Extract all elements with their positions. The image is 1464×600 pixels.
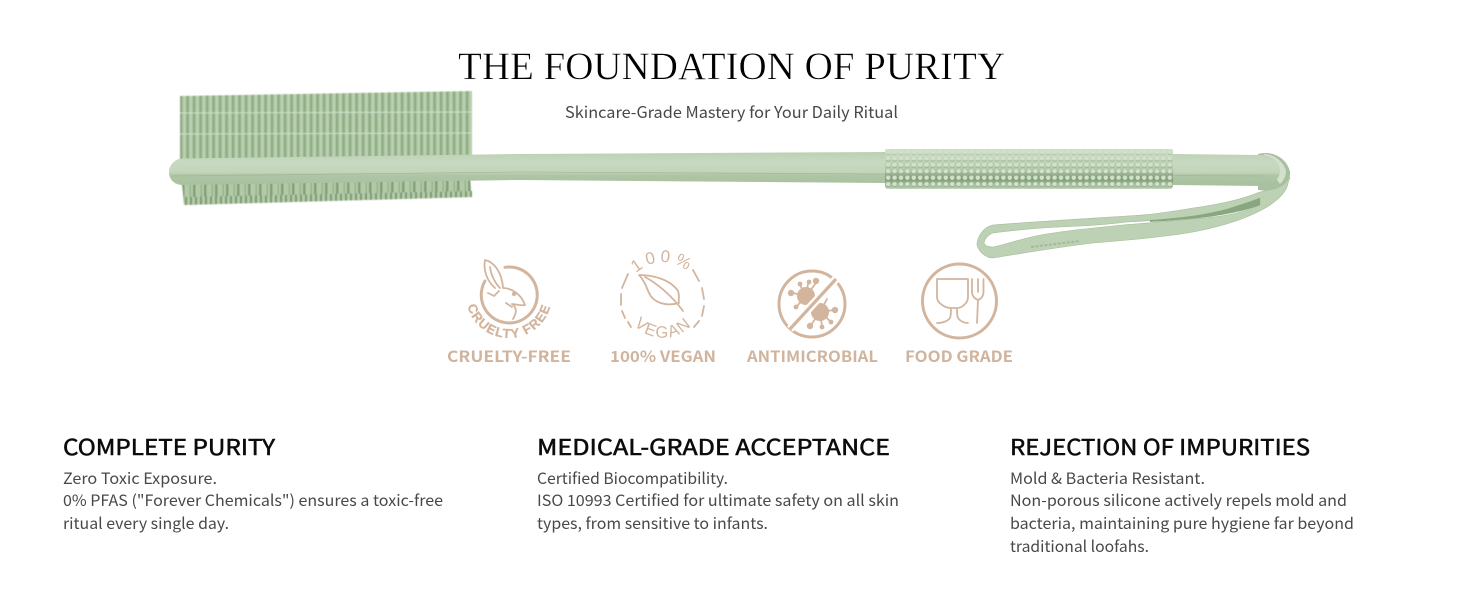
heading: REJECTION OF IMPURITIES <box>1010 430 1310 462</box>
heading: COMPLETE PURITY <box>63 430 275 462</box>
heading: MEDICAL-GRADE ACCEPTANCE <box>537 430 890 462</box>
badge text: CRUELTY FREE <box>468 304 550 338</box>
badge: food grade <box>905 264 1013 367</box>
icon: leaf <box>620 250 705 338</box>
body text: ISO 10993 Certified for ultimate safety on all skin <box>537 489 899 511</box>
icon: leaf: 100% <box>632 250 690 272</box>
textured grip <box>885 149 1173 189</box>
subtitle: Skincare-Grade Mastery for Your Daily Ritual <box>565 99 898 123</box>
badge: antimicrobial <box>746 271 878 367</box>
icon: crossed-out microbe <box>779 271 845 337</box>
body text: ritual every single day. <box>63 512 229 534</box>
body text: traditional loofahs. <box>1010 535 1149 557</box>
body text: Non-porous silicone actively repels mold and <box>1010 489 1347 511</box>
body text: bacteria, maintaining pure hygiene far beyond <box>1010 512 1354 534</box>
title: THE FOUNDATION OF PURITY <box>458 45 1005 88</box>
strap inner shadow <box>1150 198 1260 222</box>
column: medical-grade acceptance <box>537 430 899 534</box>
label: FOOD GRADE <box>905 345 1013 367</box>
body text: types, from sensitive to infants. <box>537 512 768 534</box>
strap logo imprint <box>1031 241 1080 247</box>
strap loop <box>977 177 1290 258</box>
lower bristles <box>182 178 472 205</box>
body text: Zero Toxic Exposure. <box>63 467 217 489</box>
product: silicone back brush <box>169 91 1290 258</box>
handle end cap <box>1258 153 1290 191</box>
label: 100% VEGAN <box>610 345 716 367</box>
badge: cruelty-free <box>447 259 571 367</box>
body text <box>63 467 443 534</box>
body text: Certified Biocompatibility. <box>537 467 728 489</box>
label: ANTIMICROBIAL <box>746 345 878 367</box>
column: complete purity <box>63 430 443 534</box>
handle <box>169 152 1280 186</box>
body text <box>1010 467 1354 557</box>
badge: 100% vegan <box>610 250 716 367</box>
icon: glass and fork <box>922 264 996 338</box>
upper bristles <box>180 91 472 162</box>
body text <box>537 467 899 534</box>
label: CRUELTY-FREE <box>447 345 571 367</box>
icon: leaf: VEGAN <box>637 316 690 338</box>
body text: 0% PFAS ("Forever Chemicals") ensures a toxic-free <box>63 489 443 511</box>
column: rejection of impurities <box>1010 430 1354 557</box>
body text: Mold & Bacteria Resistant. <box>1010 467 1205 489</box>
